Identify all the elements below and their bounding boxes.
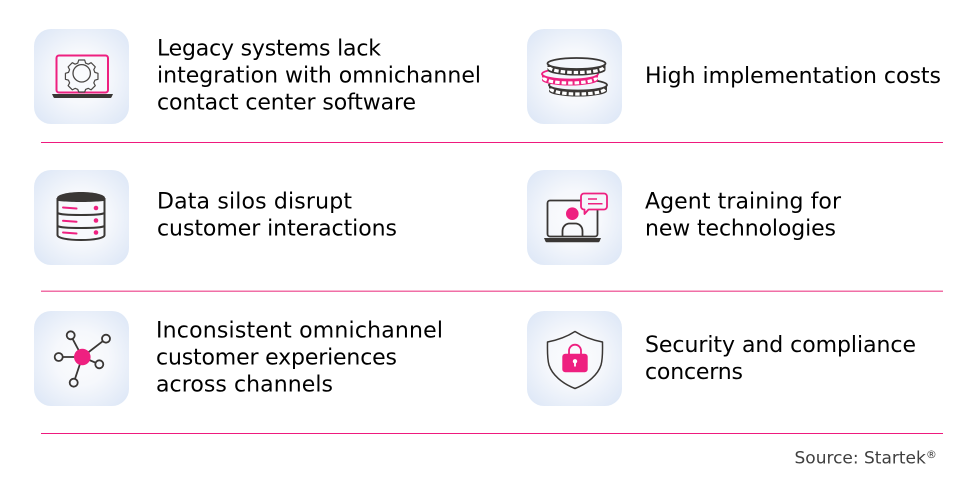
icon: agent on laptop with chat bubble (527, 170, 622, 265)
text: data silos: Data silos disrupt (157, 190, 352, 214)
text: data silos: customer interactions (157, 216, 397, 242)
text: security and compliance (645, 333, 916, 385)
text: security and compliance: concerns (645, 360, 743, 385)
source note: ® (926, 448, 937, 461)
divider three (41, 433, 943, 434)
text: inconsistent experiences: across channels (156, 372, 333, 398)
text: agent training (645, 190, 842, 242)
icon: laptop with gear (34, 29, 129, 124)
text: agent training: Agent training for (645, 190, 842, 214)
text: data silos (157, 190, 397, 242)
text: legacy systems: integration with omnichannel (157, 64, 481, 88)
text: legacy systems: Legacy systems lack (157, 36, 381, 62)
divider two (41, 290, 943, 292)
icon: network hub (34, 311, 129, 406)
text: inconsistent experiences: Inconsistent omnichannel (156, 318, 443, 344)
text: legacy systems (157, 36, 481, 116)
source note: Source: Startek (794, 448, 926, 468)
text: security and compliance: Security and compliance (645, 333, 916, 358)
divider one (41, 142, 943, 143)
text: inconsistent experiences (156, 318, 443, 398)
icon: shield with padlock (527, 311, 622, 406)
text: inconsistent experiences: customer experiences (156, 346, 397, 370)
icon: coin stack (527, 29, 622, 124)
text: legacy systems: contact center software (157, 90, 416, 116)
text: implementation costs: High implementation costs (645, 64, 941, 89)
icon: database (34, 170, 129, 265)
text: agent training: new technologies (645, 216, 836, 242)
